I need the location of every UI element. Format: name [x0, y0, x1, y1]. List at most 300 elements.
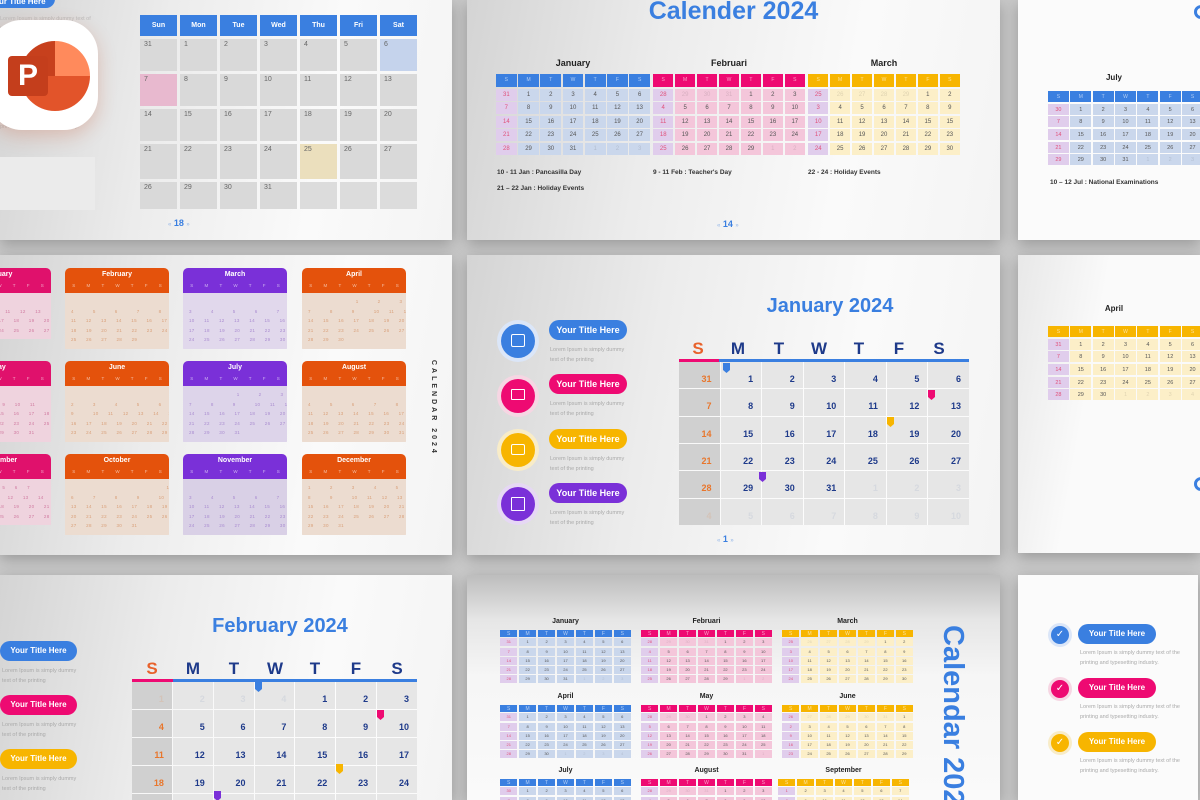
- mini june: S: [903, 706, 906, 712]
- icon: check yellow: ✓: [1056, 737, 1064, 748]
- page number 1: « 1 »: [717, 534, 734, 544]
- calendar grid january: 7: [831, 511, 836, 521]
- weekday letters feb: S: [391, 659, 403, 678]
- mini september: 5: [861, 788, 864, 793]
- mini februari: 29: [666, 639, 671, 644]
- mini march: 28: [845, 639, 850, 644]
- calendar april: 26: [1167, 380, 1173, 386]
- mini january: [500, 630, 631, 683]
- calendar februari: 23: [770, 132, 776, 138]
- mini june: 28: [826, 714, 831, 719]
- calendar grid: 6: [384, 41, 388, 48]
- calendar februari: 17: [791, 119, 798, 125]
- calendar july: 26: [1167, 145, 1173, 151]
- mini january: 25: [582, 667, 587, 672]
- lorem 4: text of the printing: [550, 520, 594, 526]
- pill pink check: [1078, 678, 1156, 698]
- mini june: 30: [864, 714, 869, 719]
- mini march: 3: [790, 649, 792, 654]
- calendar grid: 12: [344, 76, 352, 83]
- calendar march: F: [926, 77, 929, 83]
- mini april: 1: [527, 714, 529, 719]
- calendar january: 15: [525, 119, 532, 125]
- calendar grid january: 19: [909, 429, 919, 439]
- month label februari: Februari: [711, 58, 747, 68]
- calendar april: 18: [1145, 367, 1151, 373]
- check item 2: [1048, 675, 1198, 725]
- calendar july: 2: [1169, 157, 1172, 163]
- calendar january: 18: [592, 119, 599, 125]
- mini march: 7: [865, 649, 868, 654]
- calendar january: 2: [616, 146, 619, 152]
- calendar july: 31: [1122, 157, 1129, 163]
- mini februari: 27: [685, 676, 690, 681]
- calendar grid: Fri: [354, 22, 363, 29]
- mini februari: 2: [743, 639, 745, 644]
- mini january: 9: [545, 649, 548, 654]
- mini march: 28: [864, 676, 869, 681]
- calendar april: S: [1057, 329, 1060, 335]
- calendar april: 4: [1146, 342, 1149, 348]
- mini april: S: [621, 706, 624, 712]
- mini june: 11: [826, 733, 831, 738]
- mini june: 12: [845, 733, 850, 738]
- card august: S M T W T F S: [309, 376, 399, 381]
- mini july: 2: [545, 788, 548, 793]
- mini april: 28: [506, 751, 511, 756]
- calendar grid january: 9: [790, 401, 795, 411]
- calendar april: 10: [1122, 354, 1129, 360]
- mini january: 7: [508, 649, 510, 654]
- mini march: 29: [883, 676, 888, 681]
- lorem check 3: [1080, 756, 1200, 776]
- mini februari: 22: [723, 667, 728, 672]
- mini april: 30: [544, 751, 549, 756]
- weekday letters feb: M: [186, 659, 200, 678]
- mini august: W: [704, 780, 709, 786]
- calendar grid: Thu: [312, 22, 325, 29]
- mini april: 7: [508, 724, 510, 729]
- card august: [302, 361, 406, 442]
- mini january: 21: [506, 667, 511, 672]
- mini january: 11: [582, 649, 586, 654]
- calendar februari: 31: [726, 92, 732, 98]
- mini september: 6: [880, 788, 882, 793]
- calendar grid january: 24: [826, 456, 836, 466]
- calendar january: 4: [594, 92, 597, 98]
- mini march: 11: [808, 658, 812, 663]
- mini april: T: [545, 706, 548, 712]
- mini may: 17: [742, 733, 747, 738]
- calendar grid: 16: [224, 111, 232, 118]
- pill 2: [0, 695, 77, 715]
- calendar july: M: [1079, 94, 1083, 100]
- calendar april: 23: [1100, 380, 1106, 386]
- mini june: 27: [807, 714, 812, 719]
- weekday letters: S: [692, 339, 704, 358]
- calendar grid: 9: [224, 76, 228, 83]
- calendar july: W: [1123, 94, 1128, 100]
- mini april: 15: [525, 733, 530, 738]
- mini january: 29: [525, 676, 530, 681]
- calendar april: 19: [1167, 367, 1173, 373]
- card march: S M T W T F S: [190, 283, 280, 288]
- header line: [679, 359, 969, 362]
- calendar july: 30: [1100, 157, 1106, 163]
- mini april: 20: [620, 733, 624, 738]
- calendar april: 20: [1190, 367, 1196, 373]
- calendar februari: F: [771, 77, 774, 83]
- calendar january: 23: [547, 132, 554, 138]
- calendar grid january: 18: [868, 429, 878, 439]
- calendar februari: 29: [682, 92, 688, 98]
- mini may: 19: [647, 742, 652, 747]
- mini may: W: [704, 706, 709, 712]
- mini june: 28: [883, 751, 888, 756]
- mini july: S: [507, 780, 510, 786]
- calendar februari: 28: [726, 146, 732, 152]
- mini march: 18: [807, 667, 812, 672]
- calendar grid february: 18: [154, 778, 164, 788]
- calendar februari: M: [683, 77, 687, 83]
- lorem b: text of the printing: [2, 732, 46, 738]
- mini june: 10: [807, 733, 812, 738]
- pill blue check: Your Title Here: [1089, 629, 1145, 638]
- mini februari: 14: [704, 658, 709, 663]
- card may (cut): [0, 361, 51, 442]
- calendar march: 28: [881, 92, 887, 98]
- mini september: S: [785, 780, 788, 786]
- card april: [302, 268, 406, 349]
- calendar january: 30: [547, 146, 554, 152]
- mini june: 17: [807, 742, 812, 747]
- calendar grid: 18: [304, 111, 312, 118]
- slide: middle-right April: [1018, 255, 1200, 553]
- lorem check 3: printing and typesetting industry.: [1080, 768, 1159, 774]
- lorem 2: text of the printing: [550, 411, 594, 417]
- calendar grid january: 29: [743, 483, 753, 493]
- calendar grid january: 1: [748, 374, 753, 384]
- calendar january: 3: [638, 146, 641, 152]
- calendar grid: [140, 15, 417, 209]
- calendar july: 19: [1167, 132, 1173, 138]
- mini july: 4: [583, 788, 586, 793]
- mini june: 3: [809, 724, 811, 729]
- pill 3: [0, 749, 77, 769]
- mini march: 25: [807, 676, 812, 681]
- calendar april: S: [1191, 329, 1194, 335]
- mini may: [641, 705, 772, 758]
- card december: S M T W T F S: [309, 469, 399, 474]
- mini februari: T: [686, 631, 689, 637]
- calendar january: 19: [614, 119, 621, 125]
- label august small: August: [694, 767, 719, 774]
- calendar grid: Wed: [271, 22, 286, 29]
- calendar grid february: 14: [276, 750, 286, 760]
- mini may: 12: [647, 733, 652, 738]
- mini september: [778, 779, 909, 800]
- mini june: 29: [902, 751, 906, 756]
- calendar februari: 3: [793, 92, 796, 98]
- mini june: 26: [788, 714, 793, 719]
- mini april: 2: [583, 751, 586, 756]
- lorem 3: [550, 456, 624, 472]
- calendar march: 17: [815, 132, 822, 138]
- mini april: W: [563, 706, 568, 712]
- calendar grid february: 23: [358, 778, 368, 788]
- mini march: 30: [902, 676, 906, 681]
- calendar january: T: [594, 77, 597, 83]
- calendar july: 5: [1169, 107, 1172, 113]
- mini may: 16: [723, 733, 728, 738]
- month label april: April: [1105, 304, 1123, 313]
- mini january: S: [621, 631, 624, 637]
- mini june: 6: [865, 724, 868, 729]
- mini january: 3: [564, 639, 567, 644]
- calendar march: 19: [859, 132, 865, 138]
- calendar februari: 29: [748, 146, 754, 152]
- mini july: M: [526, 780, 530, 786]
- mini january: 27: [620, 667, 624, 672]
- calendar grid january: 21: [702, 456, 712, 466]
- calendar march: 22: [924, 132, 931, 138]
- mini june: 23: [788, 751, 793, 756]
- mini june: 27: [864, 751, 869, 756]
- calendar grid january: 26: [909, 456, 919, 466]
- mini april: 31: [506, 714, 511, 719]
- calendar grid february: 20: [236, 778, 246, 788]
- mini march: 27: [826, 639, 831, 644]
- marker yellow feb: [336, 764, 343, 774]
- calendar februari: 30: [704, 92, 710, 98]
- mini march: 2: [903, 639, 905, 644]
- calendar februari: 16: [770, 119, 776, 125]
- mini april: 23: [544, 742, 549, 747]
- mini februari: 26: [666, 676, 671, 681]
- mini februari: 7: [705, 649, 708, 654]
- pill yellow check: Your Title Here: [1089, 737, 1145, 746]
- calendar grid: Sat: [393, 22, 404, 29]
- mini march: 25: [788, 639, 793, 644]
- slide: middle-left year overview: [0, 255, 452, 555]
- mini februari: 31: [704, 639, 709, 644]
- calendar april: 4: [1191, 392, 1194, 398]
- agenda item 2: [497, 374, 627, 417]
- mini april: F: [602, 706, 605, 712]
- mini may: 15: [704, 733, 709, 738]
- calendar march: 3: [817, 105, 820, 111]
- calendar july: T: [1146, 94, 1149, 100]
- calendar grid: 5: [344, 41, 348, 48]
- weekday letters: M: [731, 339, 745, 358]
- mini january: 15: [525, 658, 530, 663]
- mini july: T: [545, 780, 548, 786]
- calendar january: 10: [570, 105, 576, 111]
- weekday letters feb: [146, 659, 403, 678]
- icon: monitor: [497, 375, 539, 417]
- calendar februari: T: [706, 77, 709, 83]
- calendar march: M: [838, 77, 842, 83]
- marker pink feb: [377, 710, 384, 720]
- mini march: 17: [788, 667, 793, 672]
- mini april: 13: [620, 724, 624, 729]
- calendar march: T: [904, 77, 907, 83]
- mini june: 5: [846, 724, 849, 729]
- calendar grid february: 1: [159, 694, 164, 704]
- mini march: T: [865, 631, 868, 637]
- calendar februari: T: [749, 77, 752, 83]
- calendar grid: 10: [264, 76, 272, 83]
- calendar grid: 26: [344, 146, 352, 153]
- mini january: 20: [620, 658, 624, 663]
- mini may: 5: [649, 724, 651, 729]
- calendar grid january: 2: [914, 483, 919, 493]
- mini march: 6: [846, 649, 849, 654]
- calendar februari: 5: [683, 105, 687, 111]
- calendar grid: Tue: [233, 22, 244, 29]
- calendar march: S: [948, 77, 951, 83]
- mini februari: 18: [647, 667, 652, 672]
- calendar grid: 3: [264, 41, 268, 48]
- mini august: 1: [724, 788, 727, 793]
- calendar grid january: 5: [748, 511, 753, 521]
- calendar april: 31: [1055, 342, 1061, 348]
- mini march: 27: [845, 676, 850, 681]
- icon: powerpoint: P: [18, 59, 38, 92]
- calendar grid january: 10: [826, 401, 836, 411]
- mini may: 1: [762, 751, 764, 756]
- card april: April: [346, 271, 362, 278]
- mini january: 2: [545, 639, 548, 644]
- mini februari: S: [648, 631, 651, 637]
- pill purple: [549, 483, 627, 503]
- calendar grid: 24: [264, 146, 272, 153]
- label march small: March: [837, 618, 858, 625]
- pill purple: Your Title Here: [556, 488, 620, 498]
- label april small: April: [558, 693, 573, 700]
- calendar grid january: 16: [785, 429, 795, 439]
- mini april: 4: [583, 714, 586, 719]
- mini may: 28: [685, 751, 690, 756]
- weekday letters: T: [774, 339, 784, 358]
- month label july: July: [1106, 73, 1122, 82]
- calendar january: 1: [594, 146, 597, 152]
- lorem check 2: printing and typesetting industry.: [1080, 714, 1159, 720]
- calendar grid february: 2: [200, 694, 205, 704]
- calendar march: 28: [903, 146, 909, 152]
- calendar april: 5: [1169, 342, 1172, 348]
- calendar grid: 1: [184, 41, 188, 48]
- mini january: 5: [602, 639, 604, 644]
- calendar grid february: 21: [276, 778, 286, 788]
- mini februari: 3: [762, 639, 764, 644]
- mini februari: 2: [762, 676, 764, 681]
- calendar grid january: 25: [868, 456, 878, 466]
- mini july: S: [621, 780, 624, 786]
- calendar grid january: 4: [873, 374, 878, 384]
- mini may: 6: [668, 724, 670, 729]
- calendar january: 26: [614, 132, 621, 138]
- mini september: 1: [786, 788, 788, 793]
- calendar january: 24: [570, 132, 576, 138]
- mini april: 14: [506, 733, 511, 738]
- card august: August: [342, 364, 366, 371]
- calendar july: 14: [1055, 132, 1061, 138]
- lorem b: Lorem Ipsum is simply dummy: [2, 722, 76, 728]
- calendar july: [1048, 91, 1200, 165]
- mini january: W: [563, 631, 568, 637]
- mini march: 15: [883, 658, 888, 663]
- calendar februari: 4: [662, 105, 665, 111]
- card march: March: [225, 271, 245, 278]
- calendar grid: Mon: [191, 22, 206, 29]
- mini july: T: [583, 780, 586, 786]
- mini august: S: [762, 780, 765, 786]
- mini februari: 9: [743, 649, 745, 654]
- calendar april: 15: [1078, 367, 1084, 373]
- mini january: 18: [582, 658, 587, 663]
- calendar july: 27: [1190, 145, 1196, 151]
- mini may: 3: [743, 714, 745, 719]
- weekday letters: F: [894, 339, 904, 358]
- calendar january: 12: [614, 105, 621, 111]
- mini april: 8: [527, 724, 529, 729]
- calendar january: 9: [549, 105, 552, 111]
- mini june: F: [884, 706, 887, 712]
- mini june: 14: [883, 733, 888, 738]
- card december: [302, 454, 406, 535]
- calendar march: 10: [815, 119, 822, 125]
- mini august: [641, 779, 772, 800]
- calendar january: S: [638, 77, 641, 83]
- lorem a: text of the printing: [2, 678, 46, 684]
- calendar january: 1: [527, 92, 530, 98]
- icon: check pink: [1048, 677, 1072, 701]
- card september (cut): [0, 454, 51, 525]
- mini july: 1: [527, 788, 529, 793]
- calendar january: 27: [636, 132, 643, 138]
- mini may: 29: [704, 751, 709, 756]
- mini january: T: [583, 631, 586, 637]
- mini march: 21: [864, 667, 869, 672]
- month label march: March: [871, 58, 897, 68]
- mini august: 3: [762, 788, 764, 793]
- mini june: S: [789, 706, 792, 712]
- calendar january: 5: [616, 92, 619, 98]
- lorem 2: Lorem Ipsum is simply dummy: [550, 401, 624, 407]
- pill yellow check: [1078, 732, 1156, 752]
- mini january: 6: [621, 639, 623, 644]
- calendar grid february: 3: [241, 694, 246, 704]
- mini april: 2: [545, 714, 548, 719]
- mini april: 22: [525, 742, 530, 747]
- mini april: 10: [563, 724, 568, 729]
- mini may: 24: [742, 742, 747, 747]
- mini june: T: [865, 706, 868, 712]
- calendar grid january: 2: [790, 374, 795, 384]
- title january 2024: January 2024: [767, 295, 893, 317]
- calendar april: 25: [1145, 380, 1151, 386]
- mini april: S: [507, 706, 510, 712]
- calendar februari: 12: [682, 119, 688, 125]
- label september small: September: [825, 767, 862, 774]
- calendar january: 13: [636, 105, 643, 111]
- card november: November: [218, 457, 252, 464]
- mini june: 13: [864, 733, 869, 738]
- calendar march: 25: [837, 146, 843, 152]
- calendar februari: 21: [726, 132, 732, 138]
- calendar februari: 8: [749, 105, 753, 111]
